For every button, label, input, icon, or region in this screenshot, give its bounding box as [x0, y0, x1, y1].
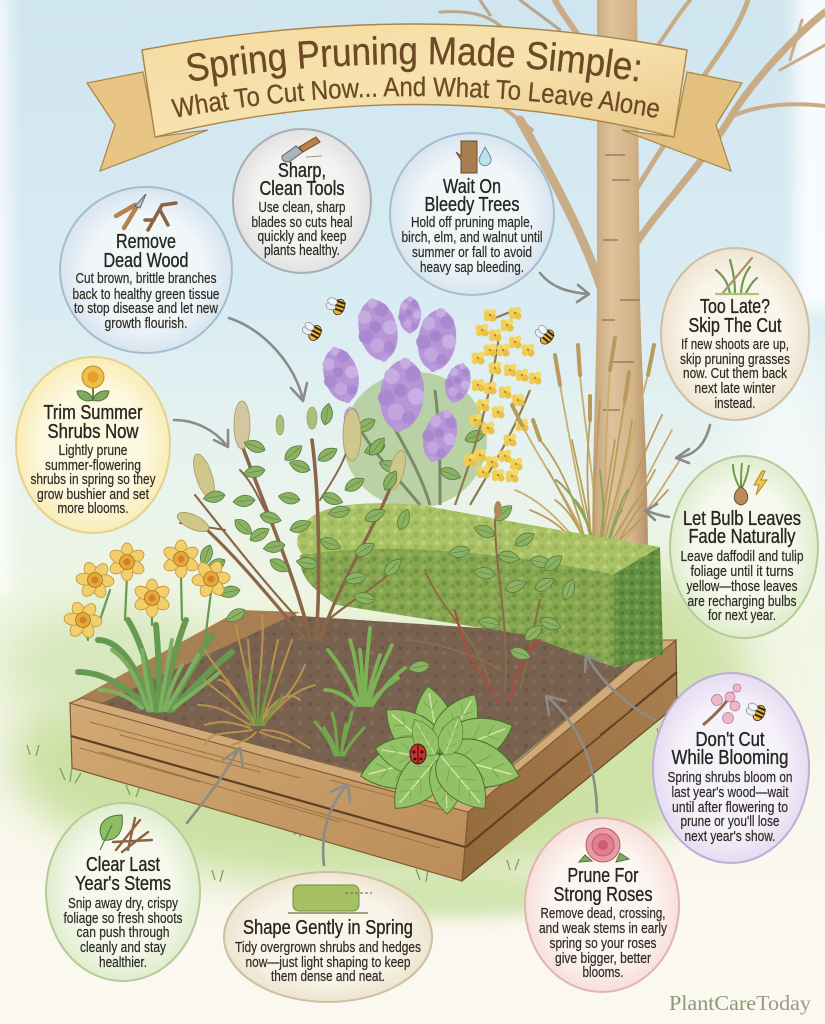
body text: to stop disease and let new [74, 301, 218, 317]
heading: Trim Summer [44, 402, 143, 424]
heading: Bleedy Trees [424, 194, 520, 216]
panel: trim summer shrubs now [16, 357, 170, 533]
body text: skip pruning grasses [680, 352, 790, 368]
body text: Tidy overgrown shrubs and hedges [235, 940, 421, 956]
icon: leaf and stems [100, 815, 152, 852]
body text [668, 770, 792, 845]
panel: wait on bleedy trees [390, 133, 554, 295]
arrows [174, 273, 710, 865]
heading: Too Late? [700, 296, 770, 318]
body text [539, 906, 668, 981]
body text: summer or fall to avoid [412, 245, 532, 261]
grass patch [0, 570, 750, 917]
body text [402, 215, 542, 276]
body text: and weak stems in early [539, 921, 668, 937]
body text: them dense and neat. [271, 969, 385, 985]
heading: Shrubs Now [48, 421, 139, 443]
watermark: PlantCareToday: PlantCareToday [669, 991, 812, 1015]
lilac shrub [316, 294, 488, 508]
body text: next late winter [694, 381, 776, 397]
body text: Use clean, sharp [258, 200, 346, 216]
banner ribbon [142, 24, 687, 137]
hosta [355, 683, 525, 822]
panel: clear last year's stems [46, 803, 200, 981]
body text: heavy sap bleeding. [420, 260, 524, 276]
heading [424, 176, 520, 216]
icon: yellow flower [77, 366, 109, 401]
ladybug [410, 744, 426, 764]
heading: Clean Tools [260, 178, 344, 200]
heading [683, 508, 801, 548]
bees [300, 295, 556, 347]
body text: shrubs in spring so they [30, 472, 156, 488]
banner [86, 23, 743, 172]
icon: pruners and twig [116, 194, 176, 230]
body text: Lightly prune [58, 443, 128, 459]
forsythia shrub [455, 307, 542, 505]
heading: Sharp, [278, 160, 326, 182]
body text: Cut brown, brittle branches [76, 271, 216, 287]
title: Spring Pruning Made Simple: [187, 36, 640, 86]
icon: rose [579, 828, 629, 862]
body text: plants healthy. [264, 243, 340, 259]
body text: healthier. [99, 955, 147, 971]
boxwood hedge [297, 503, 663, 668]
body text: until after flowering to [672, 800, 788, 816]
body text: last year's wood—wait [672, 785, 788, 801]
body text [64, 896, 182, 971]
heading: Skip The Cut [688, 315, 782, 337]
title [170, 36, 659, 118]
icon: bulb and bolt [733, 463, 767, 505]
body text: birch, elm, and walnut until [402, 230, 542, 246]
title: What To Cut Now... And What To Leave Alone [170, 76, 659, 118]
icon: blossom twig and bee [703, 684, 767, 725]
body text: Snip away dry, crispy [68, 896, 179, 912]
body text: are recharging bulbs [688, 594, 796, 610]
soil [82, 612, 660, 800]
panel: prune for strong roses [525, 818, 679, 992]
heading: Let Bulb Leaves [683, 508, 801, 530]
summer shrub [175, 401, 413, 640]
body text: summer-flowering [45, 458, 141, 474]
body text: Hold off pruning maple, [411, 215, 533, 231]
banner left tail [87, 72, 208, 171]
body text [680, 337, 790, 412]
body text: cleanly and stay [80, 940, 167, 956]
heading: Strong Roses [554, 884, 652, 906]
body text: back to healthy green tissue [72, 287, 220, 303]
body text: blades so cuts heal [252, 215, 352, 231]
body text: Leave daffodil and tulip [680, 549, 804, 565]
body text: growth flourish. [104, 316, 188, 332]
body text: foliage until it turns [690, 564, 794, 580]
icon: trunk and sap drop [456, 141, 491, 173]
body text: blooms. [582, 965, 624, 981]
body text: now. Cut them back [683, 366, 788, 382]
left side wood [70, 703, 468, 881]
banner right tail [622, 72, 742, 171]
panel: remove dead wood [60, 187, 232, 353]
body text: If new shoots are up, [681, 337, 789, 353]
body text: now—just light shaping to keep [246, 955, 410, 971]
body text: prune or you'll lose [680, 814, 780, 830]
flower spikes [175, 401, 409, 536]
icon: grass with slash [716, 258, 758, 294]
body text [30, 443, 156, 517]
body text: next year's show. [684, 829, 776, 845]
heading [554, 865, 652, 906]
back rim [70, 610, 300, 704]
raised bed [70, 610, 677, 881]
body text [72, 271, 220, 332]
heading: Year's Stems [75, 873, 171, 895]
heading: Clear Last [86, 854, 160, 876]
body text: instead. [714, 396, 756, 412]
body text: grow bushier and set [37, 487, 149, 503]
icon: hedge [288, 885, 372, 913]
body text: Remove dead, crossing, [540, 906, 666, 922]
body text: for next year. [708, 608, 776, 624]
body text: foliage so fresh shoots [64, 911, 182, 927]
body text: quickly and keep [258, 229, 346, 245]
rose shrub [405, 501, 578, 705]
panel: don't cut while blooming [653, 673, 809, 863]
panel: shape gently in spring [224, 872, 432, 1002]
body text: spring so your roses [550, 936, 656, 952]
right side wood [462, 640, 677, 881]
heading: Prune For [568, 865, 639, 887]
body text [235, 940, 421, 985]
dry grass clump [198, 615, 315, 748]
heading: Wait On [443, 176, 501, 198]
body text: can push through [76, 925, 170, 941]
ornamental grass [512, 338, 680, 552]
panel: too late skip the cut [661, 248, 809, 420]
heading: Remove [116, 231, 176, 253]
body text: Spring shrubs bloom on [668, 770, 792, 786]
heading: Dead Wood [104, 250, 188, 272]
heading [672, 729, 788, 769]
body text [252, 200, 352, 259]
heading: While Blooming [672, 747, 788, 769]
heading [260, 160, 344, 200]
heading [104, 231, 188, 272]
icon: chisel [282, 137, 322, 162]
body text: give bigger, better [555, 951, 651, 967]
heading [75, 854, 171, 895]
heading: Don't Cut [696, 729, 765, 751]
heading: Fade Naturally [688, 526, 796, 548]
daffodils [57, 540, 237, 710]
body text: yellow—those leaves [686, 579, 798, 595]
panel: sharp clean tools [233, 129, 371, 273]
heading [44, 402, 143, 443]
heading [688, 296, 782, 337]
small green shoots [315, 712, 364, 755]
tree [440, 0, 825, 560]
panel: let bulb leaves fade naturally [670, 456, 818, 638]
heading: Shape Gently in Spring [243, 917, 413, 939]
green grass clump [325, 628, 405, 705]
body text [680, 549, 804, 624]
body text: more blooms. [58, 501, 128, 517]
